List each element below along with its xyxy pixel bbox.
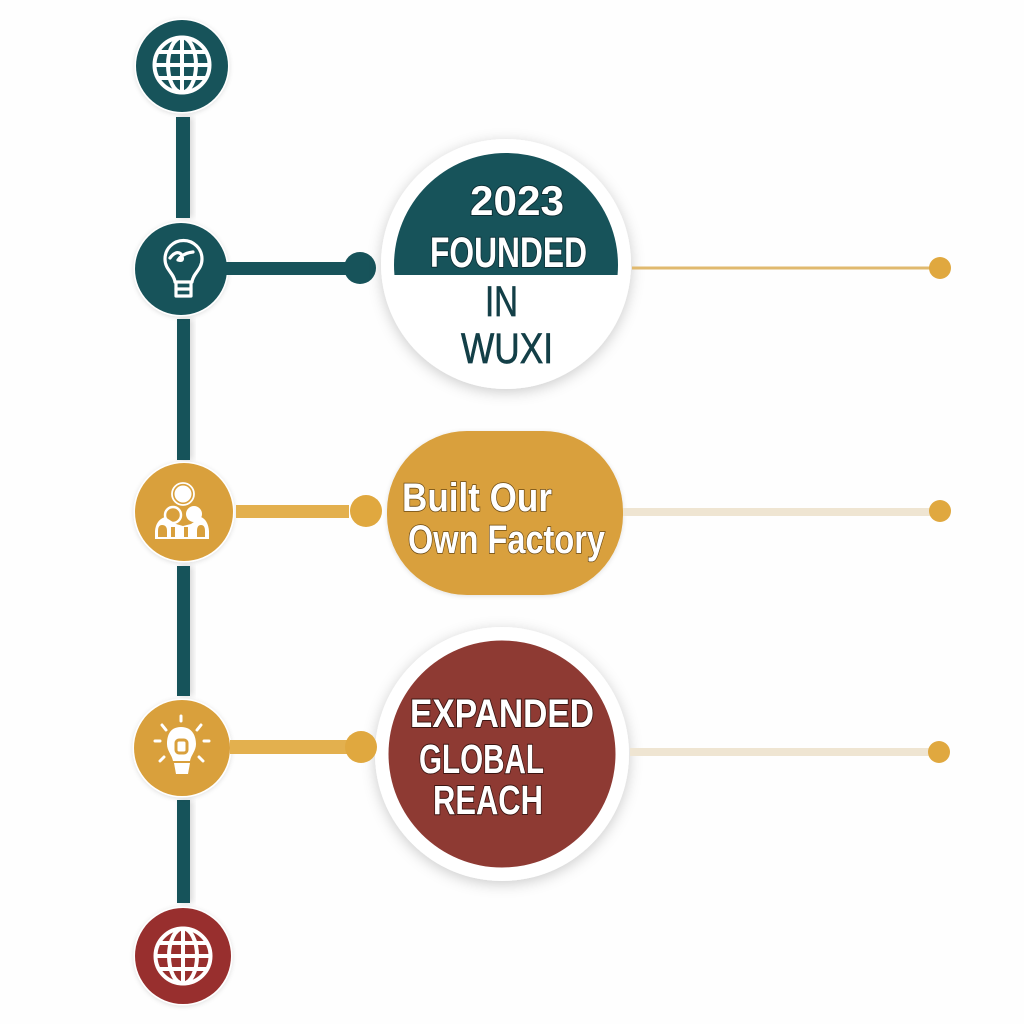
node: globe red (134, 906, 232, 1006)
connector: factory node to card (236, 495, 382, 527)
card: 2023 founded in Wuxi (381, 139, 631, 389)
connector: global node to card (230, 740, 348, 754)
node: people gold (134, 462, 234, 562)
node: globe teal (134, 18, 230, 114)
card: expanded global reach (375, 627, 629, 881)
card: expanded global reach: EXPANDED (410, 692, 594, 736)
heading: 2023 founded (430, 177, 587, 277)
card: built our own factory: Built Our (402, 476, 552, 520)
timeline spine (176, 117, 190, 903)
line and dot: row 1 (632, 257, 951, 279)
text: in Wuxi: WUXI (461, 325, 553, 373)
node: idea gold (132, 698, 232, 798)
text: in Wuxi (461, 278, 553, 373)
connector dot: global (345, 731, 377, 763)
card: built our own factory (387, 431, 623, 595)
card: expanded global reach: GLOBAL (419, 736, 544, 782)
card: expanded global reach: REACH (433, 777, 543, 823)
heading: 2023 founded: FOUNDED (430, 229, 587, 277)
node: lightbulb teal (134, 222, 228, 316)
connector: 2023 node to card (225, 252, 376, 284)
card: built our own factory: Own Factory (408, 518, 606, 562)
heading: 2023 founded: 2023 (470, 177, 564, 224)
text: in Wuxi: IN (485, 278, 518, 326)
line and dot: row 3 (630, 741, 950, 763)
line and dot: row 2 (623, 500, 951, 522)
